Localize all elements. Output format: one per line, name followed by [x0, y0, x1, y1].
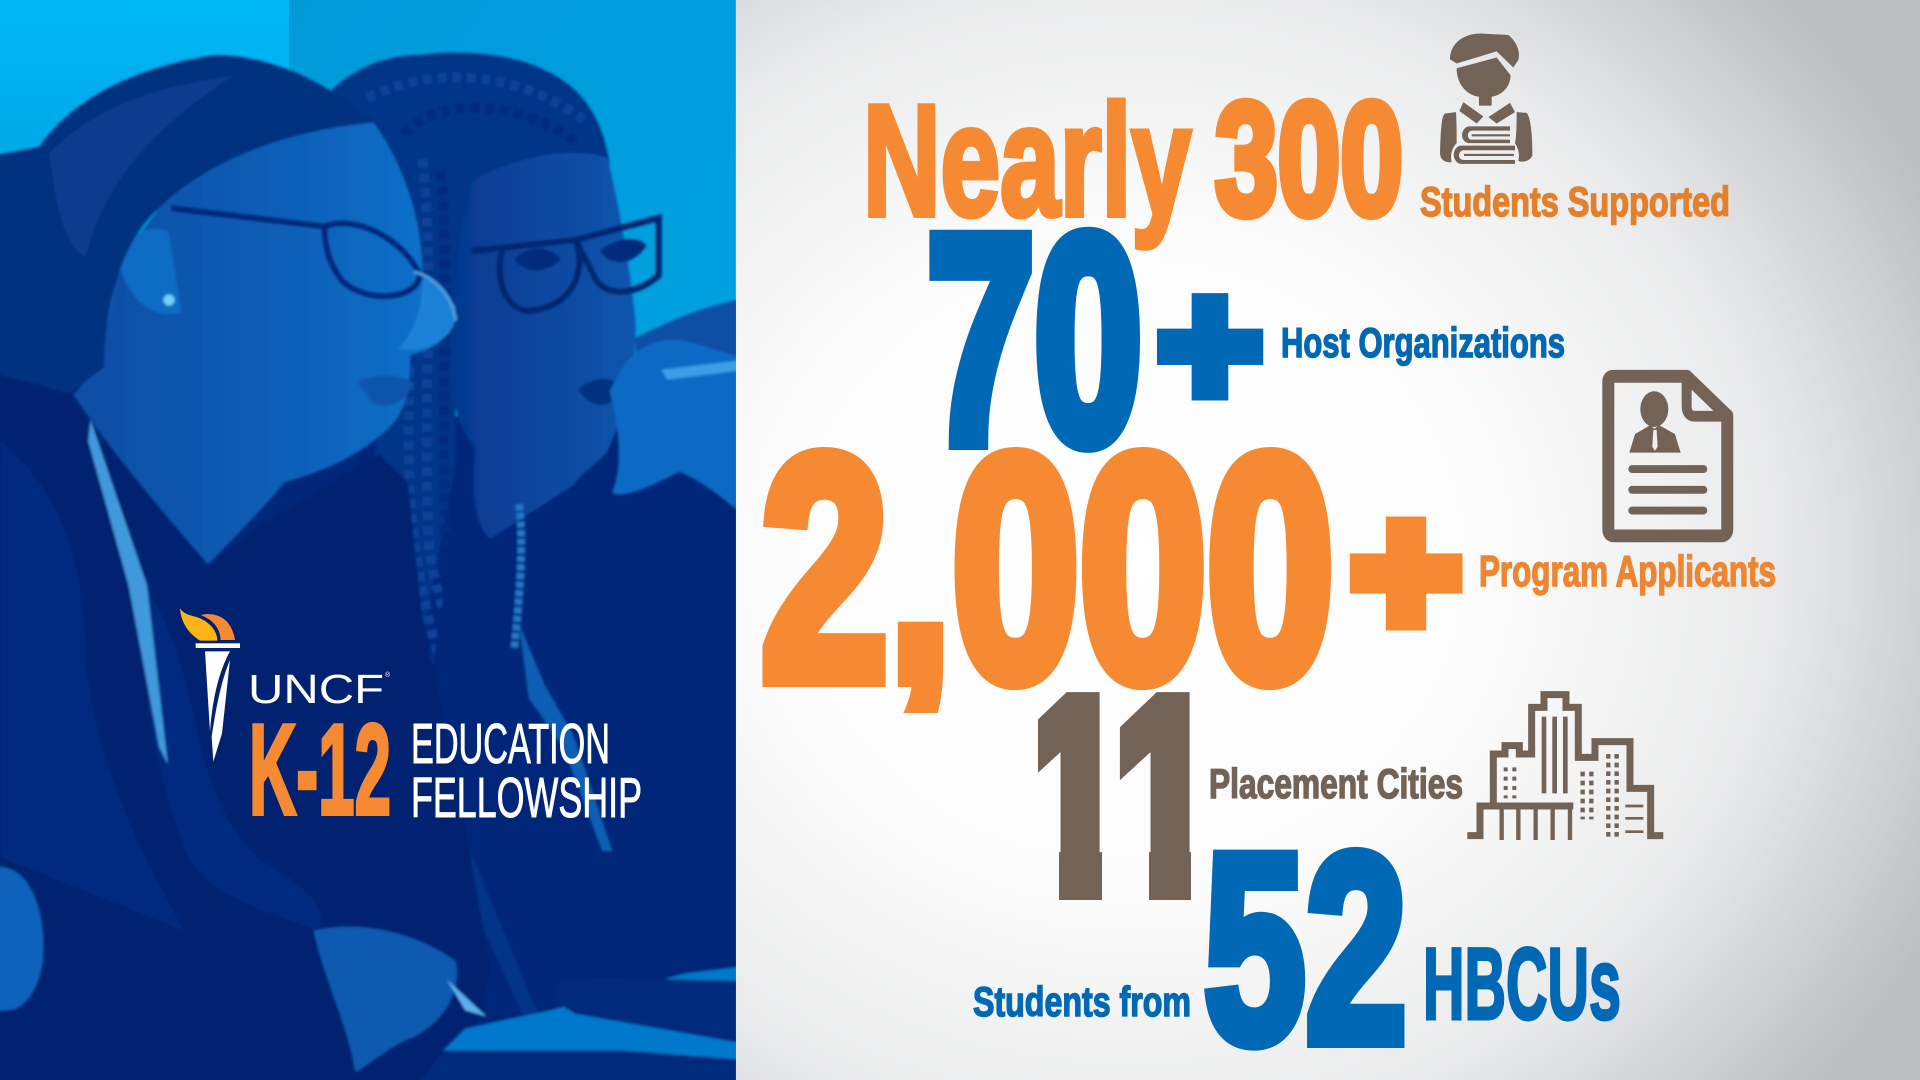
text: 11	[1038, 692, 1191, 900]
stat: Students from 52 HBCUs	[973, 798, 1621, 1080]
icon: UNCF torch	[180, 608, 240, 762]
photo: front fellow's neck and face	[73, 122, 456, 564]
photo: hand at left edge	[0, 867, 43, 1011]
photo: front fellow's lips	[358, 376, 413, 406]
photo: earring	[163, 294, 174, 306]
icon: student with books	[1440, 33, 1532, 164]
text: 300: 300	[1215, 69, 1403, 248]
panel: duotone photo of two fellows	[0, 0, 784, 1080]
text: 2,000: 2,000	[761, 391, 1334, 746]
stat: 70+ Host Organizations	[927, 176, 1565, 504]
stat: 2,000+ Program Applicants	[761, 376, 1776, 746]
photo: jacket ruffles	[144, 588, 321, 931]
text: HBCUs: HBCUs	[1423, 927, 1621, 1041]
photo: hand with pen	[313, 927, 457, 1071]
photo: tablet	[564, 977, 736, 1044]
photo: background arm	[634, 298, 736, 358]
text: registered mark: ®	[385, 671, 391, 679]
photo: rear fellow's braided hair	[332, 53, 627, 1022]
photo: rear fellow's mouth	[578, 378, 615, 406]
panel: statistics background	[736, 0, 1920, 1080]
photo: pen tip	[447, 980, 486, 1016]
text: Students Supported: Students Supported	[1420, 178, 1730, 225]
photo: front fellow's ear	[119, 229, 181, 314]
photo: desk edge	[422, 1049, 736, 1080]
text: K-12: K-12	[249, 698, 391, 842]
text: plus: +	[1352, 469, 1460, 675]
photo: rear fellow's hand	[608, 339, 736, 510]
text: Nearly: Nearly	[863, 73, 1191, 249]
icon: resume document	[1608, 376, 1727, 536]
stat: Nearly 300 Students Supported	[863, 33, 1730, 249]
photo: dark clothing base	[66, 382, 736, 1028]
photo: rear fellow's brow and eye	[514, 239, 647, 270]
photo: front fellow's jacket	[0, 365, 490, 1080]
text: 11: 1	[1114, 644, 1217, 948]
text: 11: 1	[1024, 644, 1127, 948]
text: 70: 70	[927, 176, 1142, 504]
stat: 11 Placement Cities	[1024, 644, 1663, 948]
photo: front fellow's nose highlight	[398, 279, 456, 350]
text: Students from: Students from	[973, 978, 1191, 1025]
photo: lanyard	[88, 420, 168, 764]
photo: sleeve	[0, 1009, 14, 1013]
photo: rear fellow's neck and face	[451, 153, 636, 539]
photo: head wrap	[0, 55, 376, 394]
photo: hair braid texture	[366, 72, 586, 654]
photo: rear fellow's glasses	[471, 218, 659, 311]
text: EDUCATION: EDUCATION	[411, 712, 610, 776]
text: Program Applicants: Program Applicants	[1479, 547, 1776, 596]
photo: pearl necklace	[514, 504, 521, 649]
photo: table	[442, 966, 736, 1061]
photo: front fellow's glasses	[171, 208, 420, 296]
photo: rear fellow's jacket	[432, 598, 618, 1012]
logo: UNCF K-12 Education Fellowship	[180, 608, 642, 842]
icon: city skyline	[1467, 695, 1663, 840]
text: Host Organizations: Host Organizations	[1281, 319, 1565, 366]
text: Placement Cities: Placement Cities	[1209, 760, 1463, 807]
text: UNCF wordmark: UNCF	[248, 666, 384, 712]
text: FELLOWSHIP: FELLOWSHIP	[411, 766, 642, 830]
photo: pen	[660, 359, 736, 382]
text: plus: +	[1158, 245, 1262, 444]
